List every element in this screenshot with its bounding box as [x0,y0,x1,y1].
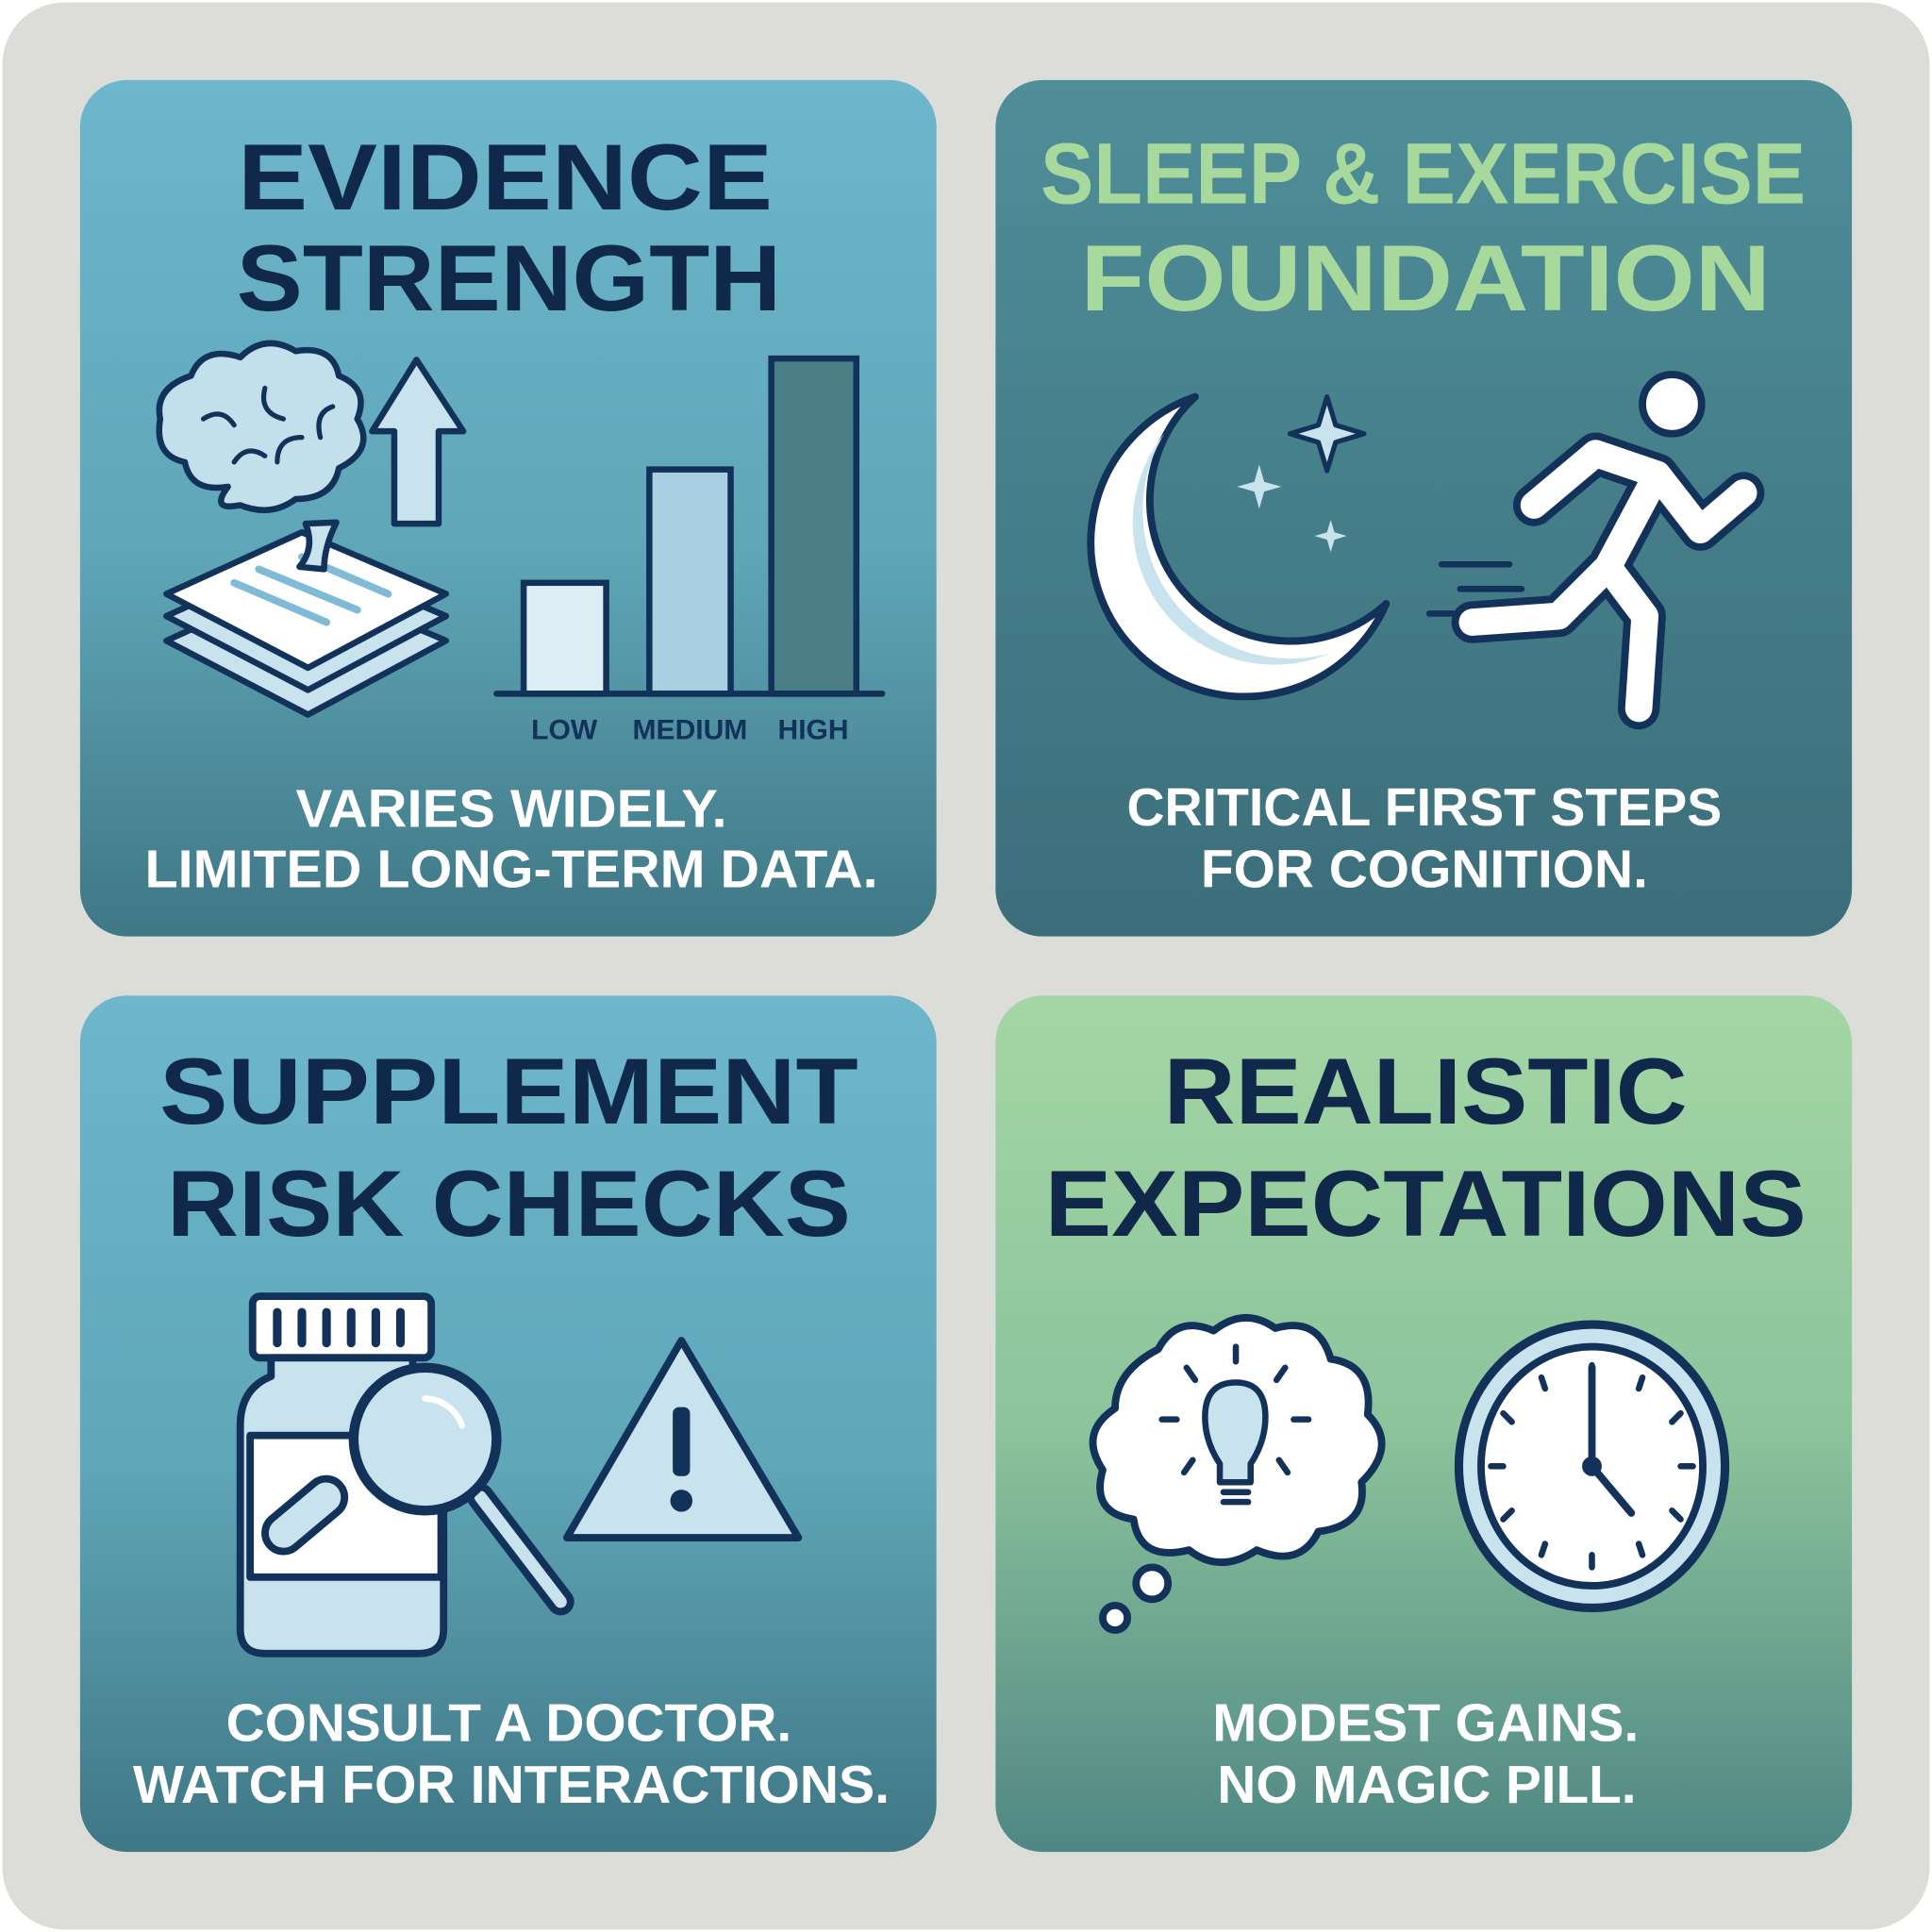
heading: sleep & exercise foundation: FOUNDATION [1080,226,1771,331]
heading: realistic expectations: REALISTIC [1164,1040,1688,1144]
text: evidence caption [144,778,878,898]
bar labels [531,715,849,746]
icon: thought cloud with lightbulb [1093,1318,1382,1630]
heading: sleep & exercise foundation: SLEEP & EXERCISE [1041,126,1806,223]
text: expectations caption: MODEST GAINS. [1212,1693,1639,1753]
text: evidence caption: VARIES WIDELY. [295,778,727,838]
icon: moon and stars [1091,397,1386,696]
panel: supplement risk checks [80,995,937,1852]
heading: supplement risk checks: RISK CHECKS [167,1152,851,1257]
text: evidence caption: LIMITED LONG-TERM DATA. [144,839,878,898]
heading: evidence strength [237,125,781,331]
text: sleep caption: FOR COGNITION. [1201,839,1648,898]
icon: clock [1458,1324,1725,1607]
panel: sleep & exercise [995,80,1852,937]
panel: evidence strength [80,80,937,937]
icon: bottle with magnifier [241,1296,560,1654]
panel: realistic expectations [995,995,1852,1852]
heading: evidence strength: STRENGTH [237,226,781,331]
bar chart: evidence levels [496,358,882,693]
bar labels: HIGH [778,715,849,746]
heading: sleep & exercise foundation [1041,126,1806,331]
bar labels: LOW [531,715,598,746]
text: supplement caption: WATCH FOR INTERACTIONS. [133,1755,890,1814]
heading: realistic expectations: EXPECTATIONS [1045,1152,1807,1257]
heading: supplement risk checks: SUPPLEMENT [159,1040,858,1144]
text: expectations caption [1212,1693,1639,1814]
icon: runner [1429,375,1743,708]
bar labels: MEDIUM [633,715,747,746]
text: expectations caption: NO MAGIC PILL. [1217,1755,1637,1814]
icon: warning triangle [567,1341,798,1538]
text: sleep caption: CRITICAL FIRST STEPS [1126,777,1722,837]
heading: realistic expectations [1045,1040,1807,1257]
icon: brain with papers and arrow [159,343,463,715]
text: sleep caption [1126,777,1722,898]
heading: supplement risk checks [159,1040,858,1257]
text: supplement caption [133,1693,890,1814]
heading: evidence strength: EVIDENCE [238,125,773,230]
text: supplement caption: CONSULT A DOCTOR. [226,1693,791,1753]
